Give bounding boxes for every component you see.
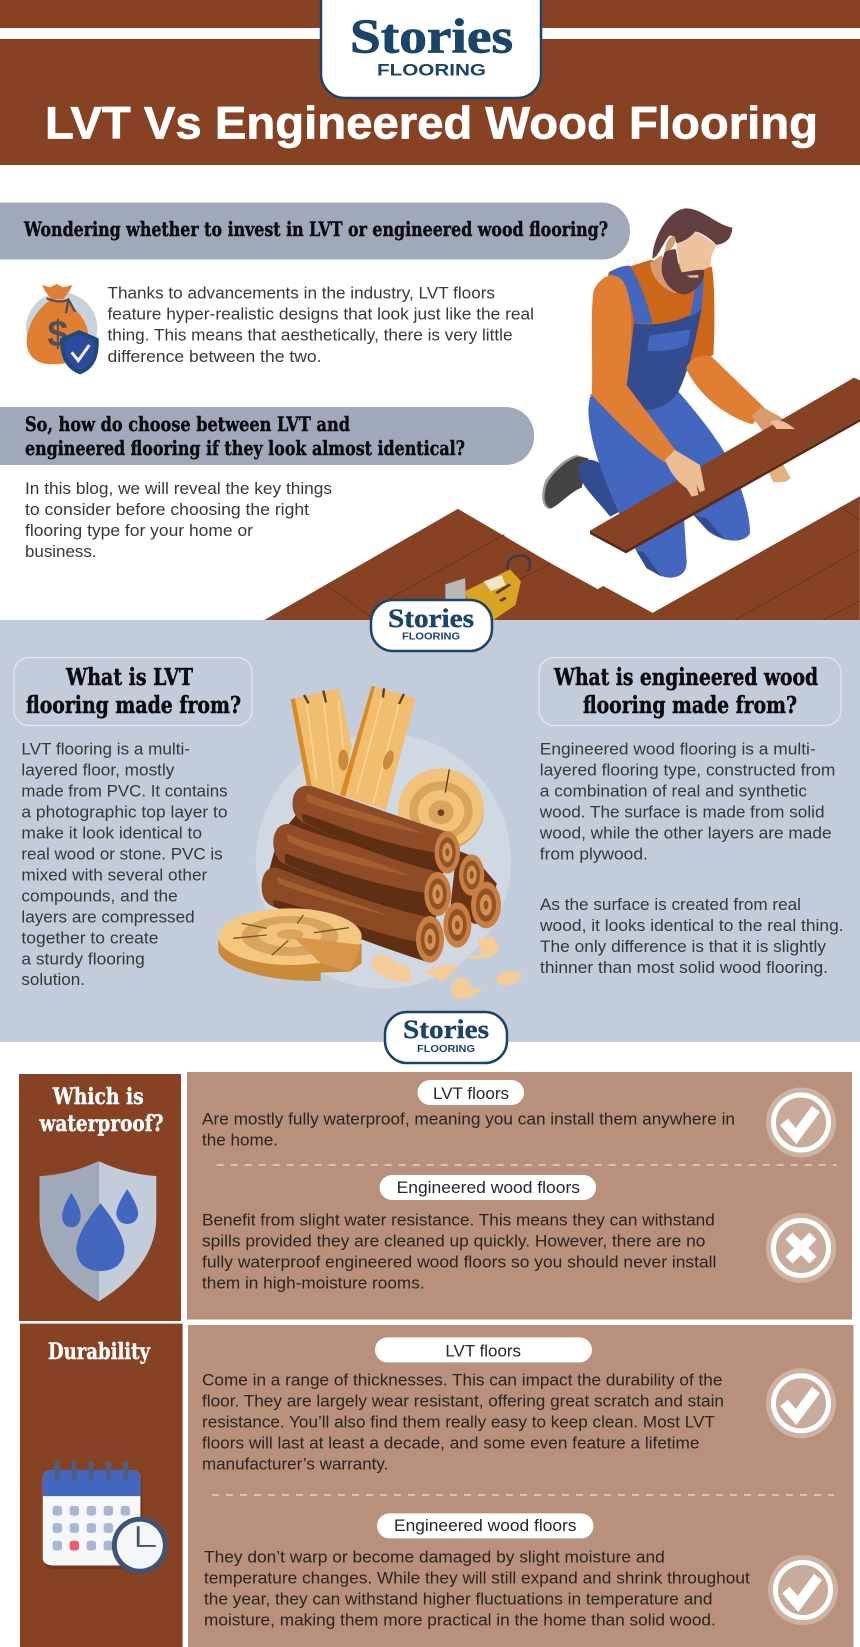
text block: LVT composition: a sturdy flooring [21,949,145,968]
text block: engineered wood composition: The only difference is that it is slightly [540,937,827,956]
text block: LVT composition: real wood or stone. PVC is [21,844,223,863]
text block: LVT composition: a photographic top layer to [21,802,228,821]
text block: engineered wood composition: Engineered wood flooring is a multi- [540,739,816,758]
text block: engineered wood composition: a combination of real and synthetic [540,781,808,800]
text block: engineered wood composition: from plywood. [540,844,648,863]
text block: LVT composition: made from PVC. It contains [21,781,228,800]
logo: top: Stories [350,8,513,64]
icon: shield with water drops [39,1161,156,1301]
text block: LVT waterproof [202,1109,735,1149]
text block: engineered water resistance: Benefit from slight water resistance. This means they can withstand [202,1210,715,1230]
text block: engineered wood composition: As the surface is created from real [540,895,801,914]
logo: lower [385,1012,507,1063]
title: LVT Vs Engineered Wood Flooring [45,98,818,148]
logo: top [321,0,541,98]
panel: durability (label) [20,1324,183,1647]
icon: tape measure [445,555,530,620]
text block: LVT durability: manufacturer’s warranty. [202,1455,388,1474]
text block: LVT composition: layers are compressed [21,907,195,926]
text block: engineered durability: moisture, making them more practical in the home than solid wood. [204,1610,716,1629]
heading pill: how to choose [0,407,534,465]
text block: blog intro: to consider before choosing the right [25,500,309,519]
text block: LVT composition: mixed with several other [21,865,208,884]
heading box: LVT [14,658,252,726]
label: engineered wood floors: Engineered wood floors [397,1178,580,1197]
text block: intro paragraph: thing. This means that aesthetically, there is very little [108,326,512,344]
panel: durability (label): Durability [48,1339,151,1365]
panel: which is waterproof (label): Which is [52,1084,144,1110]
icon: money bag with shield [26,284,99,374]
text block: LVT composition: layered floor, mostly [21,760,175,779]
text block: engineered wood composition: wood. The surface is made from solid [539,802,824,821]
logo: middle [371,600,492,651]
icon: check mark [768,1555,838,1625]
text block: LVT waterproof: Are mostly fully waterproof, meaning you can install them anywhere in [202,1109,735,1128]
logo: middle: FLOORING [402,632,460,642]
label: engineered wood floors [377,1513,594,1538]
text block: blog intro [25,479,332,561]
illustration: kneeling worker with plank [542,208,860,578]
label: LVT floors: LVT floors [433,1084,509,1103]
text block: engineered wood composition [539,739,844,977]
text block: LVT composition: compounds, and the [21,886,178,905]
text block: engineered water resistance: fully waterproof engineered wood floors so you should never install [202,1252,716,1271]
label: engineered wood floors [380,1175,596,1200]
logo: top: FLOORING [377,60,486,80]
text block: intro paragraph: difference between the two. [108,347,322,366]
icon: cross mark [766,1213,836,1283]
label: LVT floors: LVT floors [445,1342,521,1360]
icon: calendar with clock [43,1462,168,1574]
logo: lower: FLOORING [417,1044,475,1055]
text block: LVT durability [202,1371,724,1474]
heading box: engineered wood: flooring made from? [583,692,797,719]
heading pill: how to choose: engineered flooring if they look almost identical? [25,436,465,460]
panel: durability comparison [188,1325,854,1647]
text block: LVT composition: together to create [21,928,159,947]
panel: waterproof comparison [187,1072,852,1320]
text block: intro paragraph [108,284,534,366]
text block: engineered water resistance: them in high-moisture rooms. [202,1273,425,1292]
text block: engineered durability [204,1547,750,1629]
text block: engineered water resistance: spills provided they are cleaned up quickly. However, there are no [202,1232,705,1250]
text block: LVT composition [21,739,228,989]
icon: check mark [766,1088,836,1158]
panel: which is waterproof (label): waterproof? [39,1111,164,1137]
text block: engineered durability: temperature changes. While they will still expand and shrink throughout [204,1568,750,1587]
text block: engineered durability: They don’t warp or become damaged by slight moisture and [204,1547,665,1566]
text block: engineered wood composition: wood, while the other layers are made [539,823,832,842]
text block: engineered durability: the year, they can withstand higher fluctuations in temperature and [204,1589,712,1608]
logo: lower: Stories [403,1015,489,1044]
heading box: LVT: What is LVT [65,664,193,691]
header band [0,0,860,165]
label: LVT floors [375,1337,592,1362]
text block: LVT durability: resistance. You’ll also find them really easy to keep clean. Most LVT [202,1413,715,1432]
heading pill: how to choose: So, how do choose between LVT and [25,412,350,436]
label: engineered wood floors: Engineered wood floors [394,1516,576,1535]
text block: LVT durability: floors will last at least a decade, and some even feature a lifetime [202,1434,699,1453]
heading pill: wondering: Wondering whether to invest in LVT or engineered wood flooring? [23,217,608,241]
text block: engineered water resistance [202,1210,716,1292]
text block: LVT composition: make it look identical to [21,823,202,842]
text block: intro paragraph: Thanks to advancements in the industry, LVT floors [108,284,495,302]
panel: what each floor is made from [0,600,860,1063]
illustration: stacked logs and planks [218,686,523,999]
text block: LVT waterproof: the home. [202,1130,278,1149]
icon: check mark [766,1368,836,1438]
text block: blog intro: business. [25,542,96,561]
icon: money bag with shield: $ [47,312,68,354]
heading box: engineered wood [539,658,841,726]
panel: which is waterproof (label) [19,1074,181,1321]
text block: intro paragraph: feature hyper-realistic designs that look just like the real [108,304,534,324]
text block: LVT durability: floor. They are largely wear resistant, offering great scratch and stain [202,1392,724,1411]
text block: engineered wood composition: wood, it looks identical to the real thing. [539,916,844,935]
text block: engineered wood composition: thinner than most solid wood flooring. [540,958,828,977]
heading pill: wondering [0,202,630,260]
logo: middle: Stories [388,604,474,633]
heading box: LVT: flooring made from? [26,692,241,719]
text block: engineered wood composition: layered flooring type, constructed from [540,760,835,779]
text block: LVT composition: solution. [21,970,85,989]
text block: blog intro: In this blog, we will reveal the key things [25,479,332,498]
label: LVT floors [418,1080,524,1105]
illustration: wood floor [264,496,860,620]
text block: LVT composition: LVT flooring is a multi- [21,739,190,758]
text block: blog intro: flooring type for your home or [25,521,253,540]
text block: LVT durability: Come in a range of thicknesses. This can impact the durability of the [202,1371,722,1390]
